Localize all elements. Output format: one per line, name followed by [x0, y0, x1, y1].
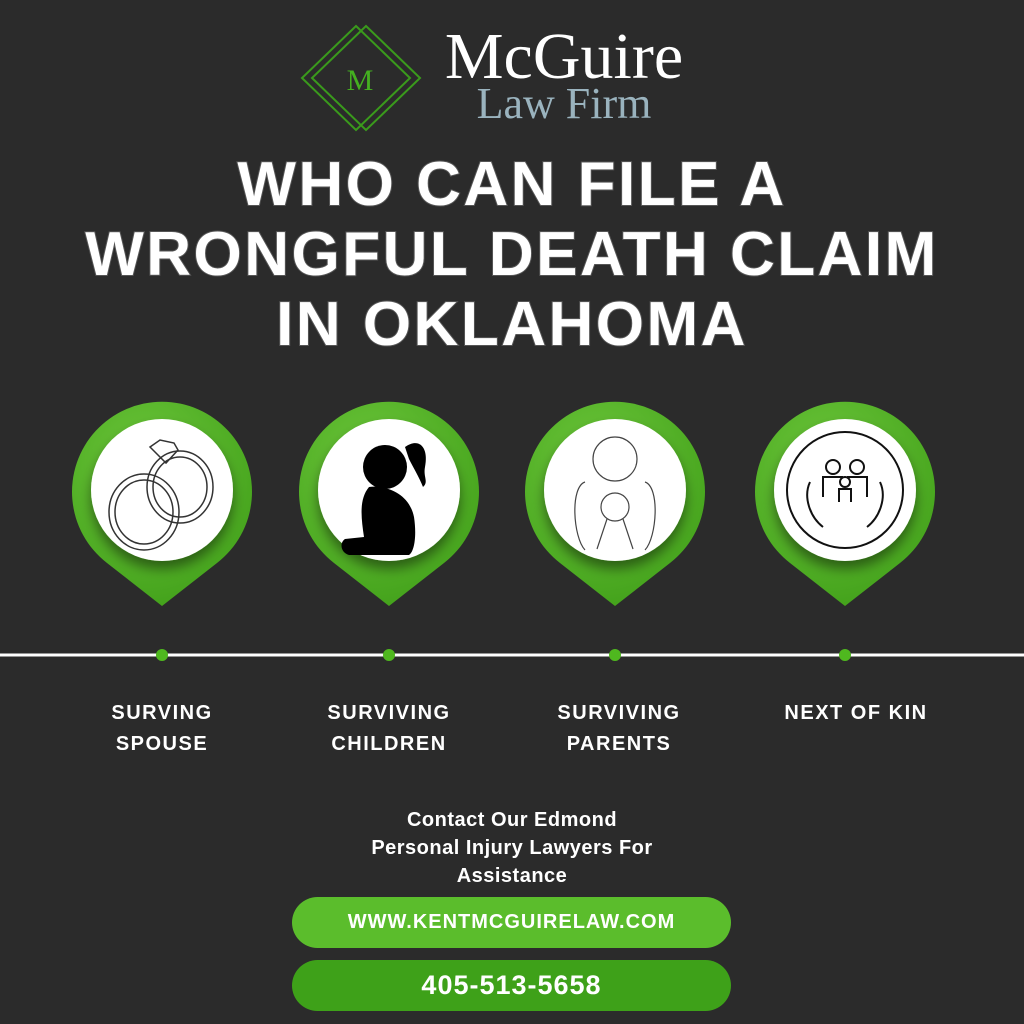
label: children	[327, 702, 451, 755]
contact text: Contact Our Edmond	[407, 809, 617, 831]
icon: child silhouette	[342, 443, 426, 555]
label: spouse: SPOUSE	[116, 733, 208, 755]
icon: diamond logo mark: M	[347, 64, 373, 97]
icon: family in hands	[787, 432, 903, 548]
pin: parents	[525, 402, 705, 606]
logo text: Law Firm	[477, 79, 651, 128]
button: phone: 405-513-5658	[421, 970, 602, 1000]
title: WRONGFUL DEATH CLAIM	[85, 220, 939, 289]
pin: next of kin	[755, 402, 935, 606]
label: spouse: SURVING	[111, 702, 213, 724]
title	[84, 150, 939, 359]
pins	[72, 402, 935, 606]
timeline	[0, 649, 1024, 661]
pin: spouse	[72, 402, 252, 606]
label: parents: SURVIVING	[557, 702, 681, 724]
icon: rings	[109, 440, 213, 550]
icon: diamond logo mark	[302, 26, 420, 130]
title: IN OKLAHOMA	[276, 290, 748, 359]
label: parents: PARENTS	[567, 733, 671, 755]
title: WHO CAN FILE A	[237, 150, 787, 219]
logo text	[445, 20, 683, 128]
contact text: Assistance	[457, 865, 567, 887]
label: next of kin: NEXT OF KIN	[784, 702, 928, 724]
button: website: WWW.KENTMCGUIRELAW.COM	[348, 911, 675, 933]
label: children: SURVIVING	[327, 702, 451, 724]
label: parents	[557, 702, 681, 755]
button: website	[292, 897, 731, 948]
pin: children	[299, 402, 479, 606]
icon: parent holding child	[575, 437, 655, 550]
contact text	[371, 809, 653, 887]
logo text: McGuire	[445, 20, 683, 93]
button: phone	[292, 960, 731, 1011]
label: children: CHILDREN	[331, 733, 447, 755]
contact text: Personal Injury Lawyers For	[371, 837, 653, 859]
logo	[300, 20, 683, 132]
label: spouse	[111, 702, 213, 755]
